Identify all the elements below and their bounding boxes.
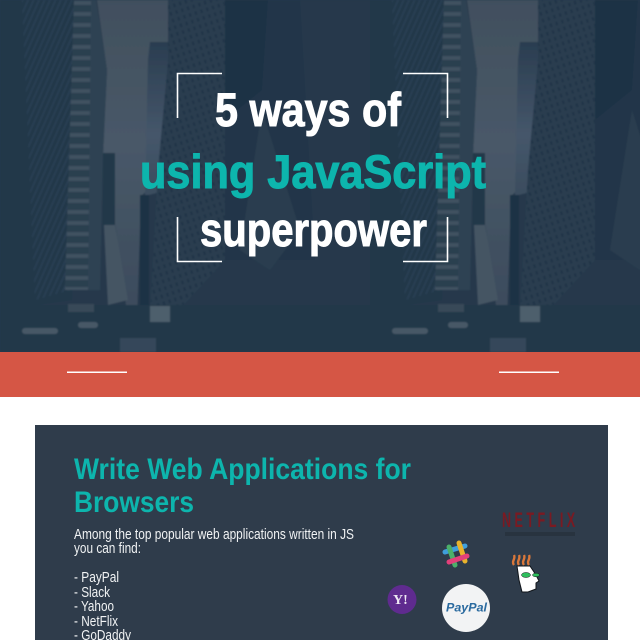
- panel heading: Write Web Applications for: [74, 453, 411, 486]
- panel body text: [74, 526, 354, 640]
- panel body text: - NetFlix: [74, 613, 118, 630]
- icon: paypal logo: PayPal: [446, 602, 488, 614]
- panel: write web applications: [35, 425, 608, 640]
- panel body text: Among the top popular web applications written in JS: [74, 526, 354, 543]
- title: [140, 83, 486, 256]
- title: 5 ways of: [215, 83, 401, 136]
- icon: slack logo: [445, 543, 467, 565]
- hero background: city street photo: [0, 0, 640, 352]
- panel body text: - Slack: [74, 584, 110, 601]
- icon: godaddy mascot: [513, 555, 540, 592]
- panel heading: [74, 453, 411, 519]
- panel heading: Browsers: [74, 486, 194, 519]
- icon: yahoo logo: [388, 585, 416, 614]
- panel body text: you can find:: [74, 540, 141, 557]
- icon: yahoo logo: Y!: [393, 593, 408, 608]
- title frame brackets: [178, 74, 448, 262]
- title: superpower: [200, 203, 427, 256]
- title: using JavaScript: [140, 145, 486, 198]
- panel body text: - PayPal: [74, 569, 119, 586]
- red band: [0, 352, 640, 397]
- panel body text: - Yahoo: [74, 598, 114, 615]
- icon: paypal logo: [442, 584, 490, 632]
- icon: netflix logo: NETFLIX: [502, 508, 576, 532]
